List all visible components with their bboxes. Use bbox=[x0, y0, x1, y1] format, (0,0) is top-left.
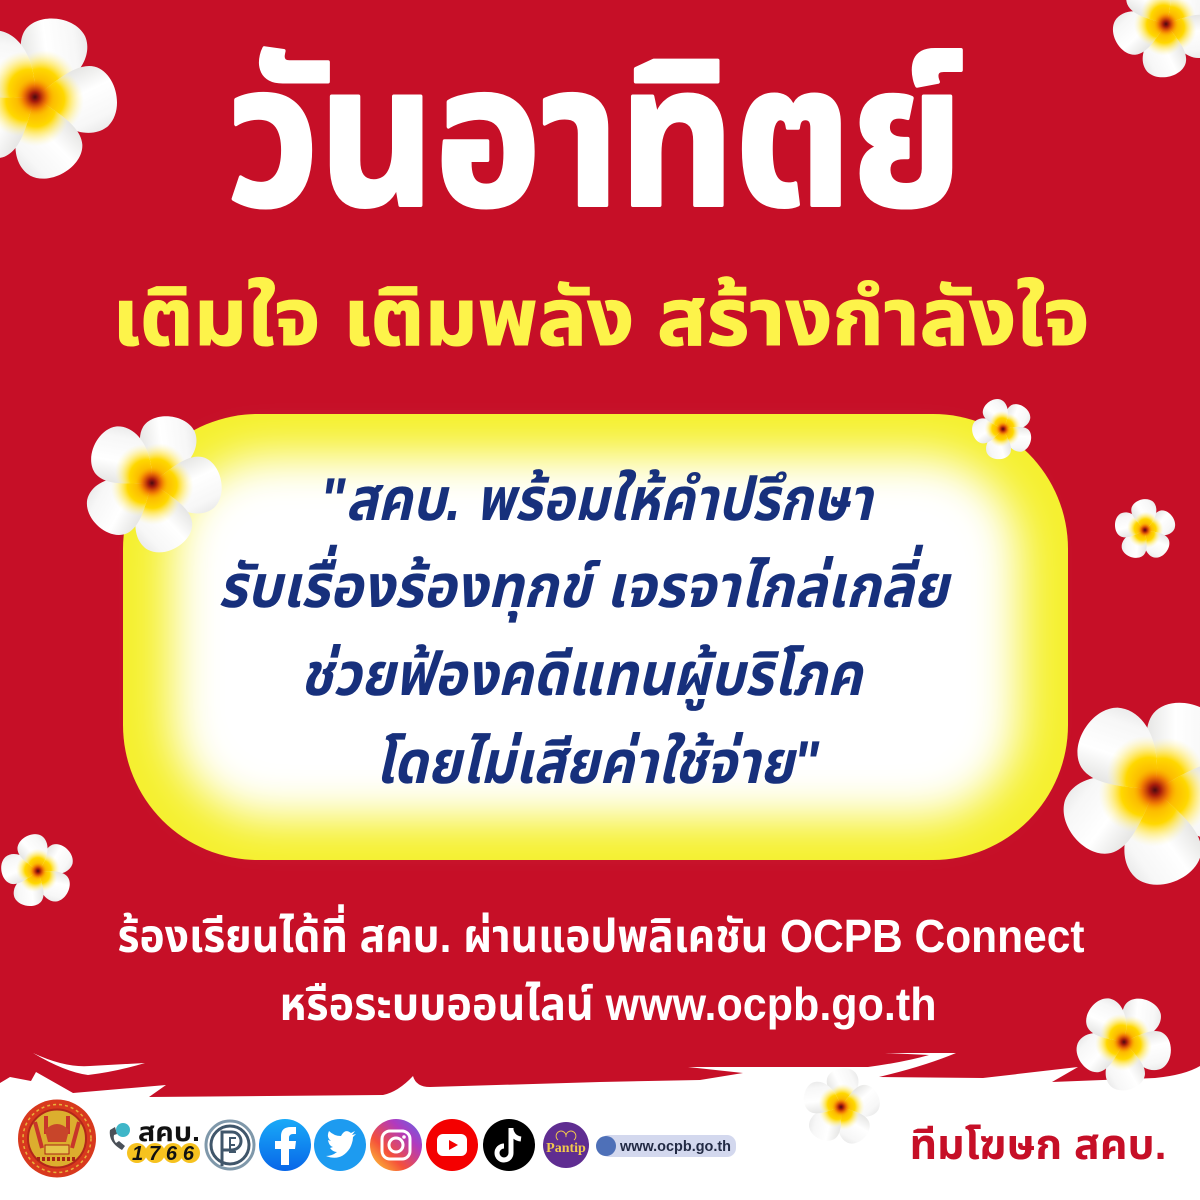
quote text: "สคบ. พร้อมให้คำปรึกษา bbox=[320, 466, 875, 533]
flower: bottom centre bbox=[791, 1060, 894, 1161]
quote text: โดยไม่เสียค่าใช้จ่าย" bbox=[375, 729, 820, 796]
subtitle: เติมใจ เติมพลัง สร้างกำลังใจ bbox=[112, 273, 1090, 362]
flower: top left bbox=[0, 15, 129, 194]
icon: tiktok bbox=[483, 1119, 535, 1171]
icon: OCPB Connect bbox=[206, 1121, 254, 1169]
quote text bbox=[218, 466, 952, 796]
flower: bottom right bbox=[1060, 984, 1188, 1109]
quote text: ช่วยฟ้องคดีแทนผู้บริโภค bbox=[300, 641, 865, 711]
website pill: www.ocpb.go.th bbox=[619, 1138, 731, 1155]
icon: instagram bbox=[370, 1119, 422, 1171]
flower: top right bbox=[1092, 0, 1200, 101]
flower: panel left bbox=[75, 413, 231, 565]
flower: panel top right bbox=[957, 387, 1047, 476]
panel: quote bbox=[123, 414, 1068, 860]
icon: hotline 1766: สคบ. bbox=[138, 1117, 200, 1147]
icon: OCPB seal bbox=[18, 1100, 96, 1178]
icon: facebook bbox=[259, 1119, 311, 1171]
website pill bbox=[596, 1135, 736, 1157]
flower: right small bbox=[1097, 486, 1190, 579]
white brush footer band bbox=[0, 1053, 1200, 1200]
contact text: หรือระบบออนไลน์ www.ocpb.go.th bbox=[280, 978, 936, 1030]
icon: pantip bbox=[543, 1122, 589, 1168]
icon: hotline 1766 bbox=[110, 1117, 200, 1165]
flower: left small bbox=[0, 818, 92, 930]
contact text bbox=[118, 904, 1084, 1030]
quote text: รับเรื่องร้องทุกข์ เจรจาไกล่เกลี่ย bbox=[218, 544, 952, 623]
flower: right large bbox=[1037, 683, 1200, 914]
icon: hotline 1766: 1766 bbox=[132, 1143, 195, 1165]
contact text: ร้องเรียนได้ที่ สคบ. ผ่านแอปพลิเคชัน OCPB Connect bbox=[118, 904, 1084, 962]
title: วันอาทิตย์ bbox=[227, 26, 963, 247]
icon: youtube bbox=[426, 1119, 478, 1171]
signature: ทีมโฆษก สคบ. bbox=[910, 1121, 1166, 1168]
icon: pantip: Pantip bbox=[546, 1141, 586, 1156]
icon: twitter bbox=[314, 1119, 366, 1171]
